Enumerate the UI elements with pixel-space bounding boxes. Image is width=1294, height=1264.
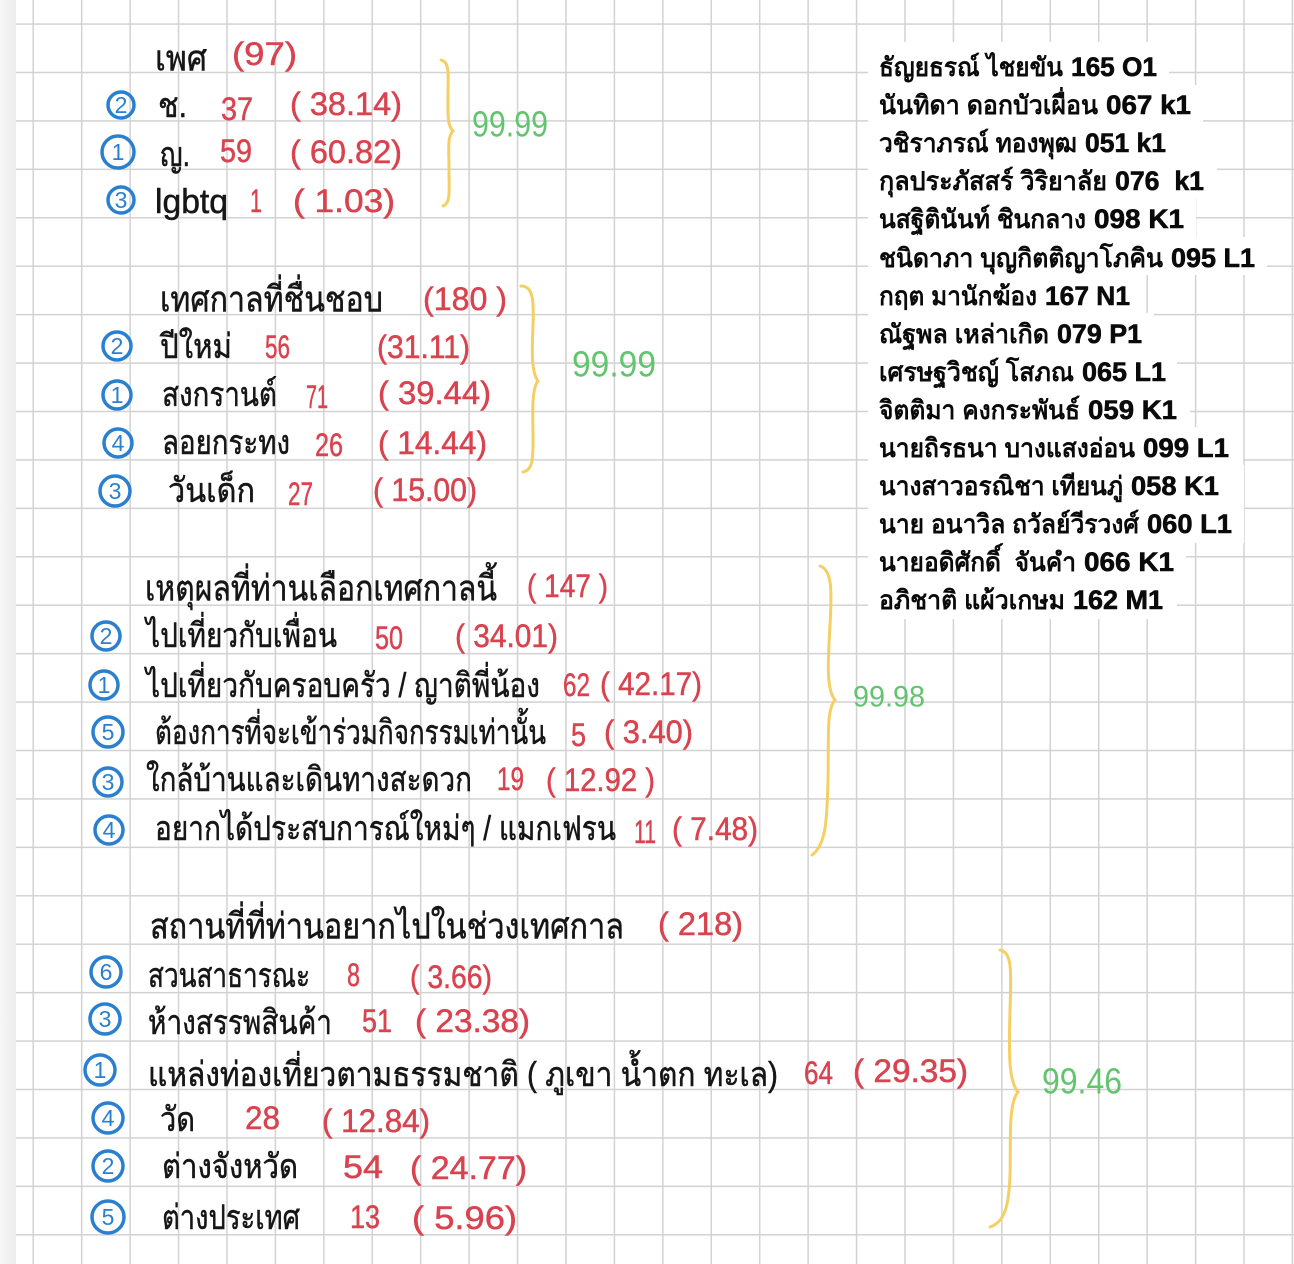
row: loy krathong: ลอยกระทง [162, 424, 290, 462]
name list: นายถิรธนา บางแสงอ่อน [879, 433, 1135, 463]
row: children's day [100, 470, 477, 512]
row: loy krathong [104, 424, 487, 463]
total: place: 99.46 [1042, 1060, 1122, 1102]
name list: นายอดิศักดิ์ จันคำ [879, 542, 1076, 577]
brace: gender total [441, 60, 453, 206]
row: male: 2 [115, 92, 127, 118]
row: with family: ( 42.17) [600, 666, 702, 702]
panel: favourite festival [100, 274, 656, 512]
row: with friends [92, 612, 558, 656]
row: male [108, 86, 402, 127]
row: lgbtq: 1 [250, 183, 262, 219]
row: abroad: ต่างประเทศ [162, 1199, 300, 1237]
row: children's day: วันเด็ก [168, 470, 255, 510]
row: other province: 2 [102, 1153, 114, 1179]
row: other province: ( 24.77) [410, 1150, 527, 1186]
row: temple: 28 [245, 1100, 280, 1136]
name list: นันทิดา ดอกบัวเผื่อน [879, 86, 1098, 120]
row: with friends: 2 [100, 623, 112, 649]
row: other province: ต่างจังหวัด [162, 1148, 298, 1186]
heading: gender [155, 36, 297, 78]
row: children's day: ( 15.00) [373, 472, 477, 508]
row: abroad: 5 [102, 1204, 114, 1230]
row: male: 37 [221, 91, 253, 127]
name list: อภิชาติ แผ้วเกษม [879, 585, 1065, 615]
row: public park: 6 [100, 959, 112, 985]
row: female: ( 60.82) [290, 134, 402, 170]
row: joining activities: ต้องการที่จะเข้าร่วมกิจกรรมเท่านั้น [155, 708, 546, 752]
panel: place to visit [85, 902, 1122, 1237]
row: near home: 3 [102, 769, 114, 795]
row: near home [94, 760, 655, 799]
row: male: ช. [158, 87, 187, 125]
heading: reason: ( 147 ) [527, 568, 608, 604]
row: lgbtq: lgbtq [155, 183, 228, 221]
name list: ธัญยธรณ์ ไชยขัน [879, 51, 1063, 83]
name list: 051 k1 [1085, 128, 1166, 158]
row: abroad [92, 1199, 517, 1237]
brace: place total [990, 950, 1018, 1227]
row: new experience: ( 7.48) [672, 811, 758, 847]
heading: place: สถานที่ที่ท่านอยากไปในช่วงเทศกาล [150, 902, 624, 946]
row: female [102, 133, 402, 174]
row: mall: ห้างสรรพสินค้า [148, 1004, 332, 1042]
name list: ณัฐพล เหล่าเกิด [879, 319, 1049, 352]
name list: 066 K1 [1084, 547, 1174, 577]
name list: กุลประภัสสร์ วิริยาลัย [879, 166, 1107, 198]
row: temple: 4 [102, 1105, 115, 1131]
name list: 095 L1 [1171, 243, 1255, 273]
row: new year [103, 327, 470, 366]
row: with friends: 50 [375, 620, 403, 656]
row: mall: 51 [362, 1003, 392, 1039]
heading: reason: เหตุผลที่ท่านเลือกเทศกาลนี้ [145, 562, 498, 610]
row: new year: 2 [111, 333, 123, 359]
total: gender: 99.99 [472, 104, 548, 144]
name list: 098 K1 [1094, 204, 1184, 234]
name list: นาย อนาวิล ถวัลย์วีรวงศ์ [879, 509, 1139, 539]
name list: 058 K1 [1131, 471, 1219, 501]
name list: นสฐิตินันท์ ชินกลาง [879, 204, 1086, 237]
row: songkran: 1 [111, 382, 123, 408]
name list: 079 P1 [1057, 319, 1142, 349]
row: public park: สวนสาธารณะ [148, 957, 310, 995]
row: joining activities: 5 [571, 717, 586, 753]
row: lgbtq [108, 183, 395, 221]
total: festival: 99.99 [572, 344, 656, 384]
row: songkran [103, 375, 491, 415]
row: new experience: 11 [634, 814, 656, 850]
row: new experience: อยากได้ประสบการณ์ใหม่ๆ / แมกเฟรน [155, 809, 616, 848]
row: female: 1 [112, 139, 124, 165]
row: public park: ( 3.66) [410, 959, 492, 995]
name list: 162 M1 [1073, 585, 1163, 615]
row: songkran: ( 39.44) [378, 375, 491, 411]
row: public park [91, 957, 492, 995]
name list: 167 N1 [1045, 281, 1130, 311]
row: new experience: 4 [103, 817, 116, 843]
row: nature: 1 [94, 1057, 106, 1083]
row: nature: แหล่งท่องเที่ยวตามธรรมชาติ ( ภูเขา น้ำตก ทะเล) [148, 1050, 778, 1095]
heading: place: ( 218) [658, 906, 743, 942]
row: lgbtq: 3 [115, 187, 127, 213]
panel: student names [868, 42, 1267, 619]
name list: จิตติมา คงกระพันธ์ [879, 395, 1080, 425]
row: with family [90, 662, 702, 705]
row: temple [93, 1100, 430, 1139]
name list: 060 L1 [1147, 509, 1232, 539]
row: abroad: 13 [350, 1199, 380, 1235]
row: mall: 3 [99, 1006, 111, 1032]
row: loy krathong: ( 14.44) [378, 425, 487, 461]
row: with family: 62 [563, 667, 590, 703]
row: children's day: 27 [288, 476, 313, 512]
row: new year: 56 [265, 329, 290, 365]
row: loy krathong: 26 [315, 427, 343, 463]
row: temple: ( 12.84) [322, 1103, 430, 1139]
row: near home: ใกล้บ้านและเดินทางสะดวก [146, 760, 472, 799]
row: joining activities: ( 3.40) [604, 714, 693, 750]
heading: favourite festival: เทศกาลที่ชื่นชอบ [160, 274, 383, 320]
row: nature: 64 [804, 1055, 833, 1091]
row: with friends: ไปเที่ยวกับเพื่อน [144, 612, 337, 655]
row: other province [93, 1148, 527, 1186]
name list: ชนิดาภา บุญกิตติญาโภคิน [879, 242, 1163, 275]
name list [879, 51, 1255, 615]
name list: 065 L1 [1082, 357, 1166, 387]
row: public park: 8 [347, 957, 360, 993]
row: female: 59 [220, 133, 252, 169]
row: other province: 54 [343, 1149, 383, 1185]
name list: นางสาวอรณิชา เทียนภู่ [879, 471, 1123, 503]
row: joining activities: 5 [102, 719, 114, 745]
name list: กฤต มานักฆ้อง [879, 281, 1037, 311]
row: near home: ( 12.92 ) [546, 762, 655, 798]
name list: เศรษฐวิชญ์ โสภณ [879, 356, 1074, 390]
row: with family: ไปเที่ยวกับครอบครัว / ญาติพี่น้อง [144, 662, 540, 705]
heading: gender: (97) [232, 36, 297, 72]
total: reason: 99.98 [853, 680, 925, 714]
heading: favourite festival: (180 ) [423, 281, 507, 317]
brace: festival total [521, 286, 538, 472]
name list: 076 k1 [1115, 166, 1204, 196]
row: abroad: ( 5.96) [412, 1200, 517, 1236]
row: new year: (31.11) [377, 329, 470, 365]
name list: 099 L1 [1143, 433, 1229, 463]
row: near home: 19 [497, 761, 524, 797]
row: with friends: ( 34.01) [455, 618, 558, 654]
row: nature: ( 29.35) [853, 1053, 968, 1089]
row: mall: ( 23.38) [415, 1003, 530, 1039]
row: songkran: 71 [306, 379, 328, 415]
brace: reason total [812, 566, 835, 855]
row: songkran: สงกรานต์ [162, 376, 277, 414]
row: temple: วัด [160, 1101, 195, 1139]
row: mall [90, 1003, 530, 1042]
row: loy krathong: 4 [112, 430, 125, 456]
row: children's day: 3 [109, 478, 121, 504]
name list: 067 k1 [1106, 90, 1191, 120]
panel: reason for choosing [90, 562, 925, 855]
row: male: ( 38.14) [290, 86, 402, 122]
row: with family: 1 [98, 672, 110, 698]
row: nature [85, 1050, 968, 1095]
panel: gender [102, 36, 548, 221]
row: lgbtq: ( 1.03) [293, 183, 395, 219]
name list: 059 K1 [1088, 395, 1177, 425]
row: new year: ปีใหม่ [159, 327, 232, 366]
name list: 165 O1 [1071, 52, 1157, 82]
heading: favourite festival [160, 274, 507, 320]
name list: วชิราภรณ์ ทองพุฒ [879, 128, 1077, 160]
row: female: ญ. [160, 136, 190, 174]
heading: gender: เพศ [155, 38, 207, 78]
